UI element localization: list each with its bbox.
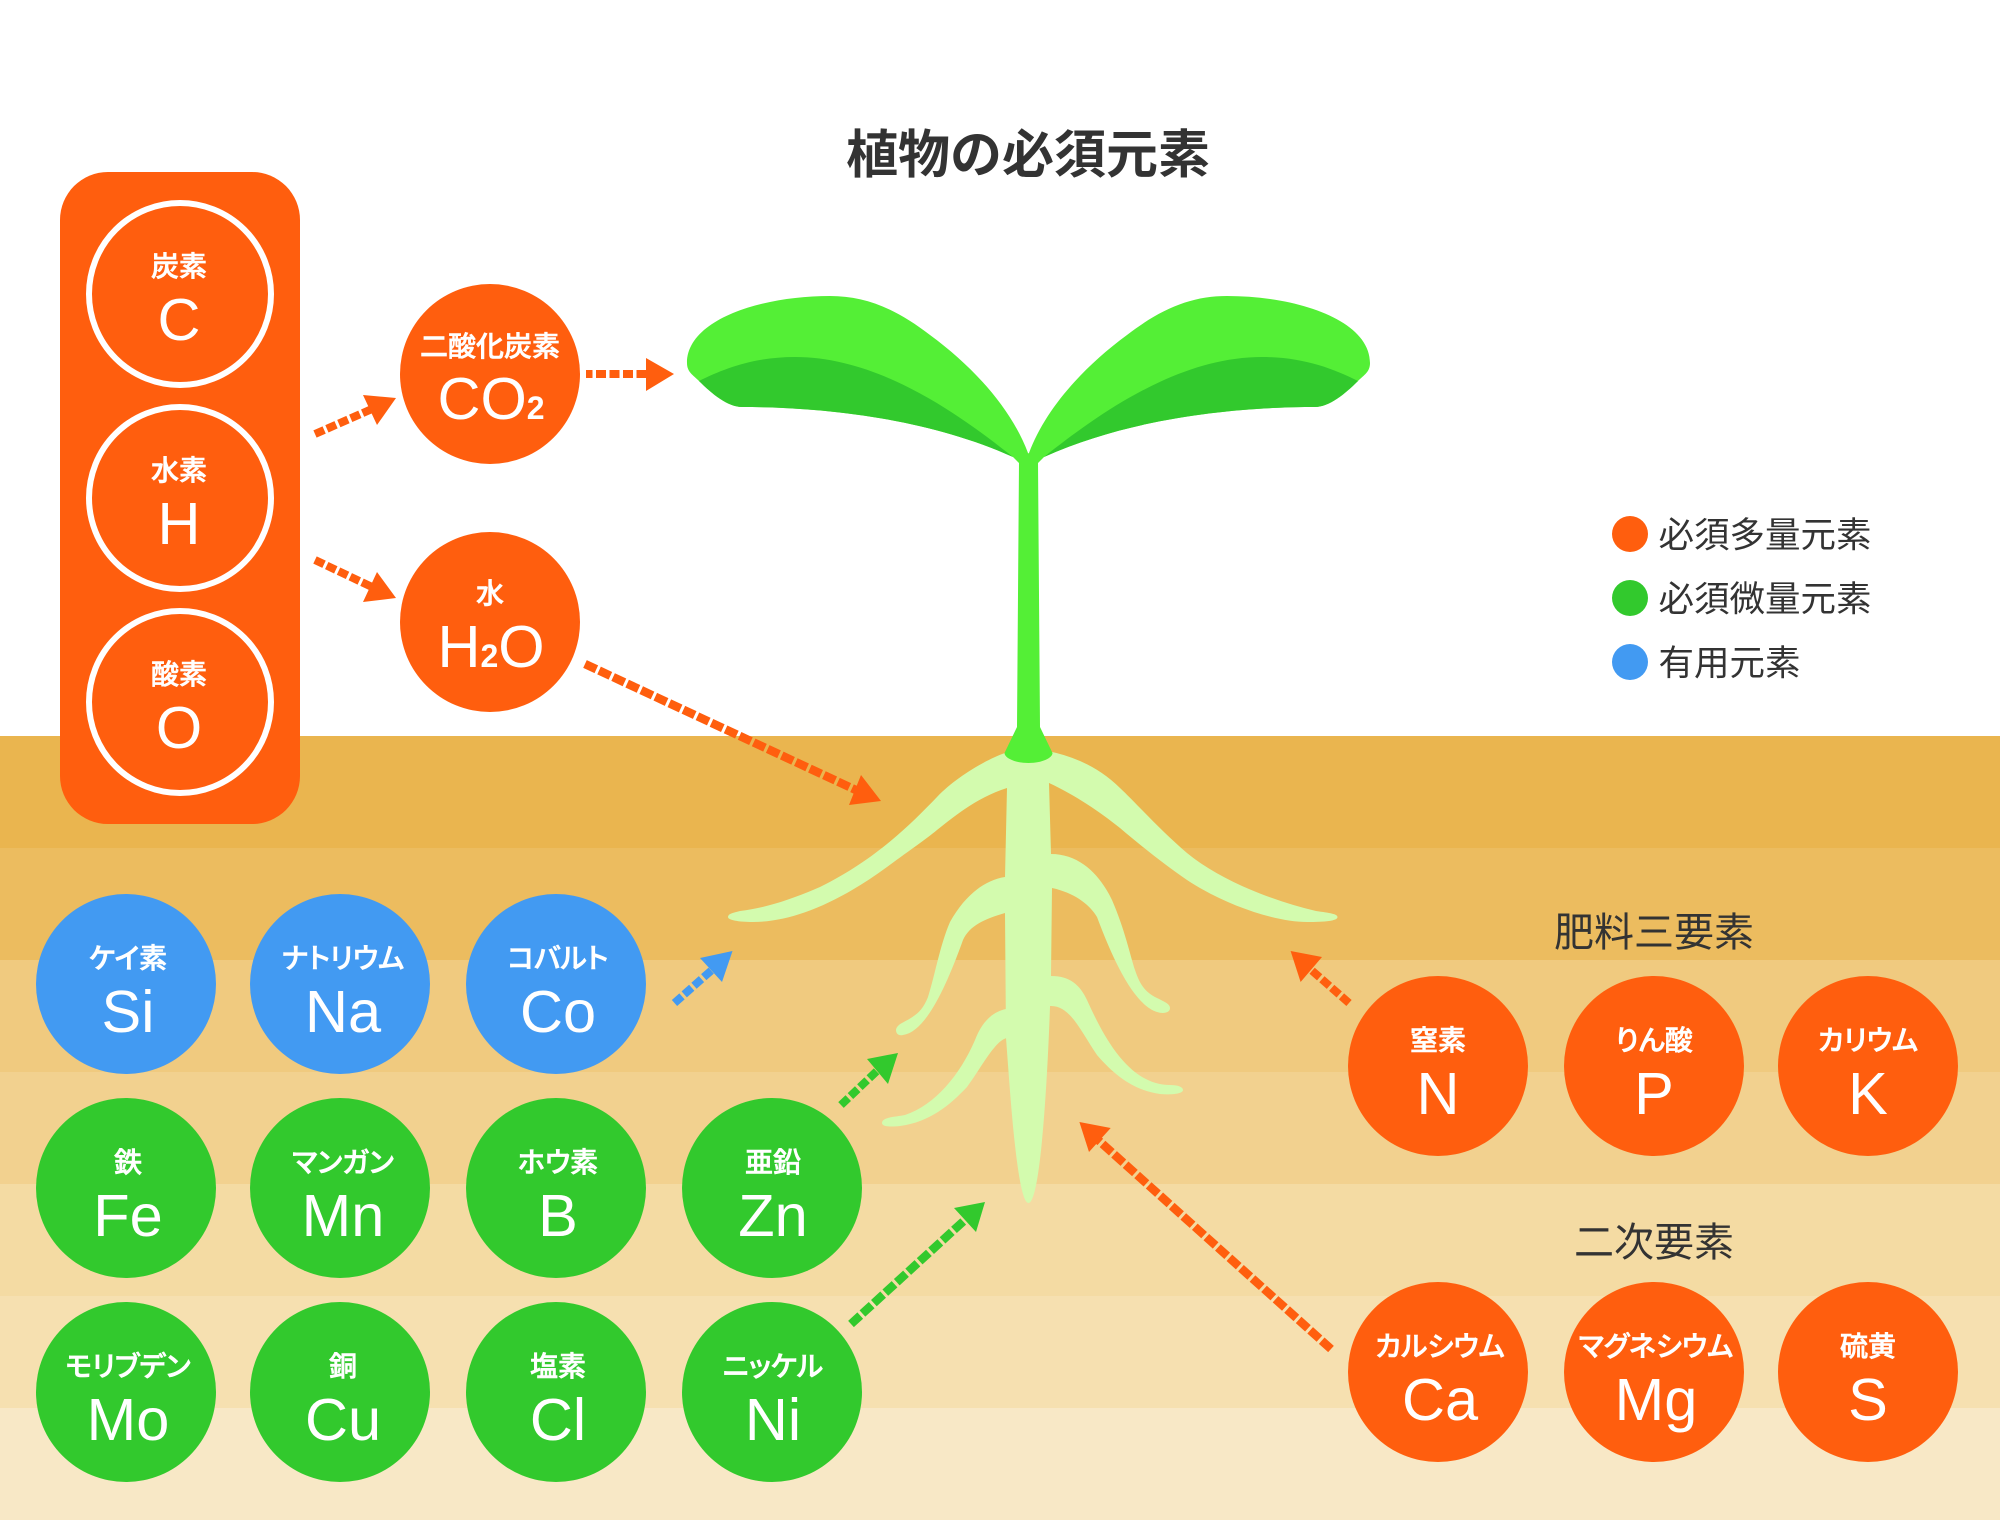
heading: three fertilizer elements: 肥料三要素 xyxy=(1554,911,1754,955)
element: molybdenum xyxy=(36,1302,216,1482)
arrow: secondary elements to root xyxy=(1079,1122,1331,1349)
element: zinc: Zn xyxy=(738,1182,808,1249)
element: cobalt: コバルト xyxy=(508,943,608,974)
molecule: water: H2O xyxy=(437,613,545,680)
arrow: beneficial elements to root xyxy=(674,951,732,1003)
element: cobalt: Co xyxy=(520,978,596,1045)
molecule: carbon dioxide: CO2 xyxy=(437,365,545,432)
element: hydrogen: 水素 xyxy=(151,455,207,486)
element: iron: Fe xyxy=(93,1182,163,1249)
element: calcium: カルシウム xyxy=(1375,1331,1505,1362)
element: molybdenum: モリブデン xyxy=(65,1351,191,1382)
title: 植物の必須元素 xyxy=(846,127,1210,185)
element: carbon: C xyxy=(158,286,200,353)
arrow: nickel to root xyxy=(851,1202,985,1324)
element: potassium: カリウム xyxy=(1818,1025,1918,1056)
element: oxygen xyxy=(89,611,271,793)
element: calcium xyxy=(1348,1282,1528,1462)
element: cobalt xyxy=(466,894,646,1074)
element: nitrogen: 窒素 xyxy=(1410,1025,1466,1056)
element: sodium: Na xyxy=(305,978,382,1045)
element: potassium xyxy=(1778,976,1958,1156)
right leaf xyxy=(1029,296,1370,463)
molecule: water: 水 xyxy=(476,578,504,609)
element: manganese: Mn xyxy=(302,1182,384,1249)
element: nickel xyxy=(682,1302,862,1482)
arrow: zinc to root xyxy=(841,1053,898,1105)
molecule: carbon dioxide xyxy=(400,284,580,464)
element: boron: ホウ素 xyxy=(518,1147,598,1178)
element: silicon: ケイ素 xyxy=(89,943,167,974)
element: boron: B xyxy=(538,1182,578,1249)
element: chlorine xyxy=(466,1302,646,1482)
element: copper: Cu xyxy=(305,1386,381,1453)
molecule: carbon dioxide: 二酸化炭素 xyxy=(420,331,560,362)
arrow: elements to water xyxy=(315,560,396,602)
seedling stem xyxy=(1004,453,1052,763)
arrow: carbon dioxide to leaf xyxy=(586,358,674,391)
element: magnesium xyxy=(1564,1282,1744,1462)
element: hydrogen xyxy=(89,407,271,589)
element: magnesium: Mg xyxy=(1615,1366,1697,1433)
legend item: essential micronutrients: 必須微量元素 xyxy=(1658,579,1872,619)
element: copper: 銅 xyxy=(329,1351,357,1382)
element: zinc: 亜鉛 xyxy=(745,1147,801,1178)
element: molybdenum: Mo xyxy=(87,1386,169,1453)
element: nitrogen xyxy=(1348,976,1528,1156)
element: carbon: 炭素 xyxy=(151,251,207,282)
roots xyxy=(728,752,1338,1203)
legend item: essential macronutrients: 必須多量元素 xyxy=(1658,515,1872,555)
element: oxygen: 酸素 xyxy=(151,659,207,690)
element: chlorine: Cl xyxy=(530,1386,586,1453)
element: sodium: ナトリウム xyxy=(282,943,404,974)
element: sulfur xyxy=(1778,1282,1958,1462)
element: nickel: Ni xyxy=(745,1386,801,1453)
element: sulfur: S xyxy=(1848,1366,1888,1433)
element: chlorine: 塩素 xyxy=(530,1351,586,1382)
left leaf xyxy=(687,296,1028,463)
legend item: beneficial elements: 有用元素 xyxy=(1658,643,1801,683)
element: calcium: Ca xyxy=(1402,1366,1479,1433)
element: manganese xyxy=(250,1098,430,1278)
element: sodium xyxy=(250,894,430,1074)
element: manganese: マンガン xyxy=(292,1147,394,1178)
arrow: elements to carbon dioxide xyxy=(315,395,396,434)
element: copper xyxy=(250,1302,430,1482)
arrow: nitrogen group to root xyxy=(1291,951,1349,1003)
molecule: water xyxy=(400,532,580,712)
soil background bands xyxy=(0,736,2000,1520)
legend xyxy=(1612,515,1872,683)
arrow: water to root xyxy=(585,664,881,805)
element: phosphorus xyxy=(1564,976,1744,1156)
element: sulfur: 硫黄 xyxy=(1840,1331,1896,1362)
element: hydrogen: H xyxy=(158,490,200,557)
element: boron xyxy=(466,1098,646,1278)
element: silicon xyxy=(36,894,216,1074)
element: phosphorus: P xyxy=(1634,1060,1674,1127)
element: magnesium: マグネシウム xyxy=(1579,1331,1733,1362)
element: silicon: Si xyxy=(102,978,154,1045)
element: carbon xyxy=(89,203,271,385)
element: potassium: K xyxy=(1848,1060,1888,1127)
element: phosphorus: りん酸 xyxy=(1615,1025,1693,1056)
element: iron: 鉄 xyxy=(114,1147,142,1178)
element: zinc xyxy=(682,1098,862,1278)
element: nitrogen: N xyxy=(1417,1060,1459,1127)
panel: carbon hydrogen oxygen xyxy=(60,172,300,824)
element: nickel: ニッケル xyxy=(723,1351,823,1382)
element: oxygen: O xyxy=(156,694,202,761)
heading: secondary elements: 二次要素 xyxy=(1574,1221,1734,1265)
element: iron xyxy=(36,1098,216,1278)
